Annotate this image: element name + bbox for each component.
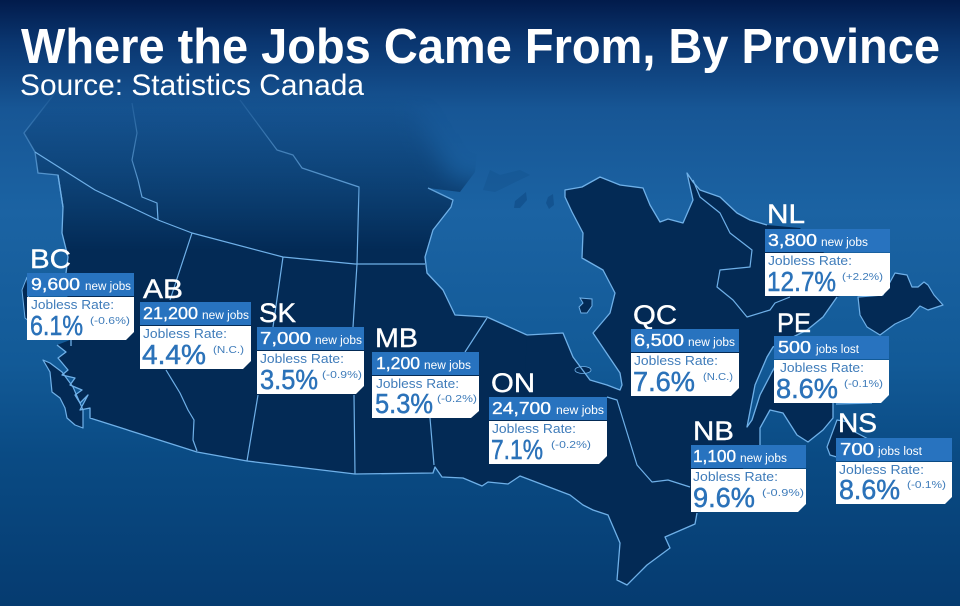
island: Haida Gwaii <box>22 277 30 322</box>
header band <box>765 229 890 252</box>
card: QC <box>631 300 739 397</box>
change: (N.C.) <box>703 371 733 383</box>
card: BC <box>27 244 134 341</box>
white body <box>257 351 364 394</box>
change: (N.C.) <box>213 344 244 356</box>
jobless caption: Jobless Rate: <box>768 253 852 268</box>
landmass: west and north, fading upward <box>24 114 527 486</box>
jobs figure: 7,000 <box>260 328 311 348</box>
card: NS <box>836 408 952 505</box>
jobs figure: 1,200 <box>376 353 420 373</box>
jobless rate: 12.7% <box>767 266 836 297</box>
jobs caption: new jobs <box>740 453 787 465</box>
header band <box>489 397 607 420</box>
jobless rate: 7.1% <box>491 434 543 465</box>
province label SK: SK <box>259 298 296 328</box>
card: SK <box>257 298 364 395</box>
island: Belcher Islands <box>579 298 592 313</box>
header band <box>836 438 952 461</box>
island: Newfoundland <box>858 273 943 335</box>
header band <box>257 327 364 350</box>
white body <box>836 462 952 504</box>
jobs caption: jobs lost <box>815 344 860 356</box>
white body <box>140 326 251 369</box>
white body <box>691 469 806 512</box>
white body <box>774 360 889 403</box>
province label NB: NB <box>693 416 734 446</box>
white body <box>372 376 479 418</box>
change: (-0.9%) <box>322 369 362 381</box>
card: MB <box>372 323 479 419</box>
change: (-0.6%) <box>90 315 130 327</box>
jobs caption: new jobs <box>424 360 471 372</box>
landmass: south and east <box>520 173 860 585</box>
jobs caption: new jobs <box>821 237 868 249</box>
province label QC: QC <box>633 300 677 330</box>
jobless caption: Jobless Rate: <box>376 376 459 391</box>
jobs figure: 700 <box>840 439 874 459</box>
jobless rate: 4.4% <box>142 339 206 370</box>
province label PE: PE <box>777 308 811 338</box>
territorial borders, northern <box>132 100 359 264</box>
coastline: north-west and Hudson Bay <box>24 93 527 335</box>
jobless caption: Jobless Rate: <box>492 421 576 436</box>
jobs caption: new jobs <box>556 405 604 417</box>
white body <box>27 297 134 340</box>
change: (-0.1%) <box>907 479 946 491</box>
jobless rate: 7.6% <box>633 366 695 397</box>
change: (-0.2%) <box>437 393 477 405</box>
header band <box>140 302 251 325</box>
province label NS: NS <box>838 408 877 438</box>
subtitle: source: Source: Statistics Canada <box>20 69 364 102</box>
jobs caption: new jobs <box>315 335 362 347</box>
jobless caption: Jobless Rate: <box>780 360 864 375</box>
jobs caption: new jobs <box>202 310 249 322</box>
jobless rate: 8.6% <box>839 474 900 505</box>
card: ON <box>489 368 607 465</box>
card: PE <box>774 308 889 404</box>
province label ON: ON <box>491 368 535 398</box>
jobless caption: Jobless Rate: <box>634 353 718 368</box>
header band <box>27 273 134 296</box>
card: AB <box>140 274 251 370</box>
card: NL <box>765 199 890 297</box>
province label BC: BC <box>30 244 71 274</box>
jobs caption: new jobs <box>688 337 735 349</box>
jobless caption: Jobless Rate: <box>143 326 227 341</box>
change: (-0.2%) <box>551 439 591 451</box>
change: (-0.9%) <box>762 487 804 499</box>
jobless caption: Jobless Rate: <box>693 469 778 484</box>
jobs figure: 1,100 <box>693 446 736 466</box>
white body <box>631 353 739 396</box>
jobless rate: 6.1% <box>30 310 83 341</box>
coastline: west, south and east <box>57 173 872 585</box>
jobless caption: Jobless Rate: <box>839 462 924 477</box>
jobs figure: 3,800 <box>768 230 817 250</box>
change: (-0.1%) <box>844 378 883 390</box>
island: Akimiski <box>575 366 591 374</box>
header band <box>372 352 479 375</box>
white body <box>765 253 890 296</box>
provincial borders, southern <box>35 152 790 487</box>
jobless caption: Jobless Rate: <box>31 297 114 312</box>
card: NB <box>691 416 806 513</box>
jobless rate: 3.5% <box>260 364 318 395</box>
jobless rate: 9.6% <box>693 482 755 513</box>
title: Where the Jobs Came From, By Province <box>21 20 940 74</box>
province label NL: NL <box>767 199 805 229</box>
island: small northern islets <box>514 192 554 209</box>
island: Nova Scotia <box>827 420 870 458</box>
jobless caption: Jobless Rate: <box>260 351 344 366</box>
header band <box>691 445 806 468</box>
jobs caption: jobs lost <box>877 446 923 458</box>
jobs figure: 6,500 <box>634 330 684 350</box>
province label MB: MB <box>375 323 418 353</box>
header band <box>631 329 739 352</box>
island: Vancouver Island <box>43 360 83 428</box>
province label AB: AB <box>143 274 183 304</box>
island: faint northern land <box>483 170 530 192</box>
white body <box>489 421 607 464</box>
header band <box>774 336 889 359</box>
jobs figure: 9,600 <box>31 274 80 294</box>
jobs caption: new jobs <box>85 281 131 293</box>
jobless rate: 5.3% <box>375 388 433 419</box>
change: (+2.2%) <box>842 271 883 283</box>
islands in Hudson Bay and James Bay <box>483 170 592 374</box>
jobless rate: 8.6% <box>776 373 838 404</box>
jobs figure: 21,200 <box>143 303 198 323</box>
jobs figure: 24,700 <box>492 398 551 418</box>
jobs figure: 500 <box>778 337 811 357</box>
